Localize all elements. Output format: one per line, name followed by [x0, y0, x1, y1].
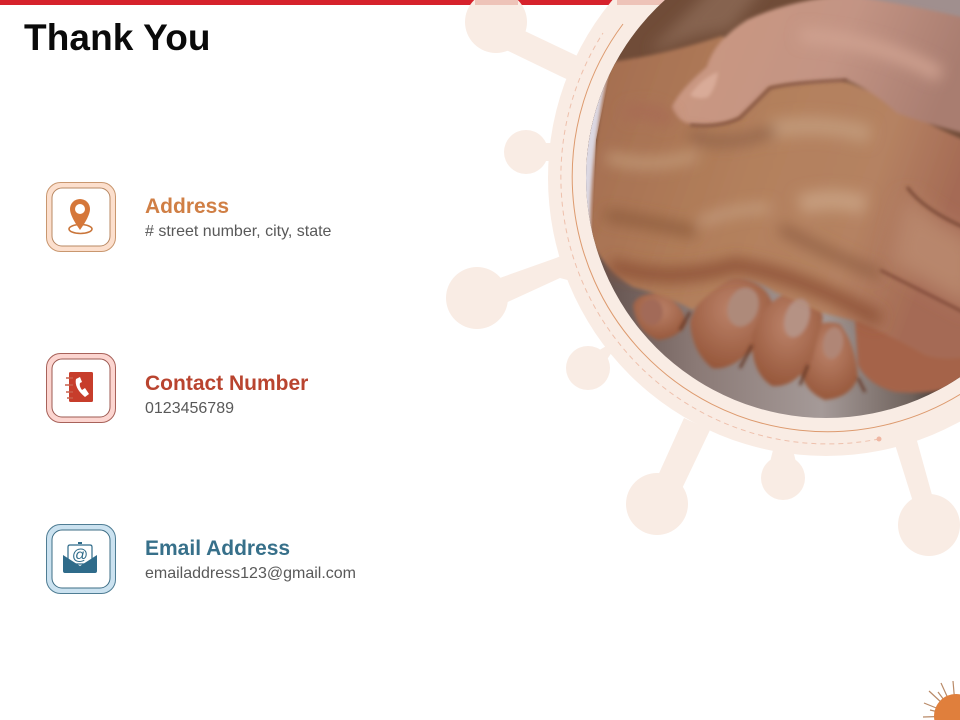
- heading: contact number: Contact Number: [145, 372, 308, 395]
- icon: phone book: [46, 353, 116, 423]
- handshake photo: [580, 0, 960, 430]
- title: Thank You: [24, 17, 211, 58]
- dashed ring: [561, 33, 879, 444]
- frame where it overlaps the red bar: [475, 0, 670, 5]
- lower fingers: [633, 294, 686, 340]
- text: email detail: emailaddress123@gmail.com: [145, 565, 356, 582]
- creases: [680, 80, 960, 392]
- finger nails: [727, 286, 760, 328]
- text: phone number: 0123456789: [145, 400, 234, 417]
- heading: email address: Email Address: [145, 537, 290, 560]
- ring dot: [876, 436, 882, 442]
- icon: email envelope: @: [72, 547, 88, 564]
- frame: knobs and ring: [446, 0, 960, 556]
- shirt cuff: [586, 74, 610, 230]
- text: address detail: # street number, city, state: [145, 223, 331, 240]
- heading: address: Address: [145, 195, 229, 218]
- circular photo panel with virus-like frame: [446, 0, 960, 556]
- main hand: [590, 36, 960, 358]
- icon: email envelope: [46, 524, 116, 594]
- icon: location pin: [46, 182, 116, 252]
- soft finger tone on the right of the hand: [893, 204, 960, 306]
- big lower finger: [855, 320, 960, 393]
- upper hand and thumb: [672, 0, 960, 136]
- thumb nail: [690, 72, 718, 98]
- hand highlights and veins: [605, 35, 940, 320]
- thin orange ring: [572, 24, 960, 432]
- top red bar: [0, 0, 670, 5]
